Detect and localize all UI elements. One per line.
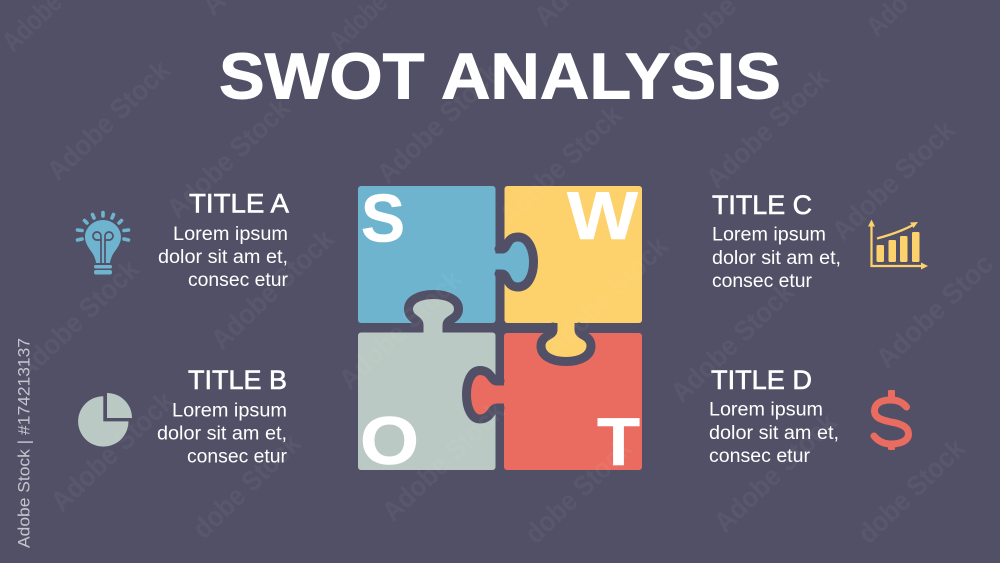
- text block: title D: TITLE D: [711, 365, 812, 395]
- watermark pattern: dobe Stock: [519, 432, 638, 549]
- watermark pattern: Adobe Stock: [700, 62, 835, 194]
- puzzle tab: weaknesses into threats: [541, 320, 591, 362]
- puzzle tab: strengths into weaknesses: [493, 237, 534, 287]
- watermark pattern: Adobe Stock: [826, 114, 961, 246]
- panel: SWOT puzzle: [358, 178, 642, 480]
- icon: growth chart: [868, 220, 928, 270]
- watermark pattern: Adobe Stock: [161, 92, 296, 224]
- letter T: T: [597, 404, 640, 480]
- text block: title A: [158, 188, 289, 291]
- watermark pattern: Adobe Stock: [376, 395, 511, 527]
- puzzle piece: weaknesses: [504, 186, 642, 323]
- puzzle piece: strengths: [358, 186, 496, 323]
- puzzle tab: opportunities into strengths: [408, 294, 458, 335]
- icon: pie chart: [78, 393, 132, 447]
- text block: title B: consec etur: [187, 446, 288, 468]
- text block: title D: Lorem ipsum: [709, 400, 823, 420]
- watermark pattern: Adobe Stock: [708, 406, 843, 538]
- text block: title B: dolor sit am et,: [157, 424, 287, 444]
- watermark pattern: Adobe Stock: [371, 57, 506, 189]
- text block: title C: TITLE C: [712, 190, 812, 220]
- text block: title C: Lorem ipsum: [712, 224, 826, 246]
- text block: title B: [157, 365, 288, 468]
- letter S: S: [361, 180, 405, 256]
- text block: title A: Lorem ipsum: [173, 224, 288, 245]
- watermark pattern: Adobe Stock: [333, 263, 468, 395]
- text block: title D: dolor sit am et,: [709, 423, 839, 444]
- text block: title C: [712, 190, 841, 292]
- icon: light bulb: [78, 212, 128, 274]
- watermark pattern: Adobe Stock: [10, 253, 145, 385]
- watermark pattern: Adobe Stock: [45, 385, 180, 517]
- text block: title B: TITLE B: [188, 365, 287, 395]
- watermark pattern: Adobe Stoc: [870, 248, 999, 374]
- text block: title B: Lorem ipsum: [172, 400, 287, 422]
- text block: title D: [709, 365, 839, 467]
- watermark pattern: Adobe Stock: [665, 276, 800, 408]
- puzzle tab: threats into opportunities: [466, 370, 506, 419]
- watermark pattern: Adobe Stock: [41, 54, 176, 186]
- watermark pattern: Adobe Stock: [493, 99, 628, 231]
- letter O: O: [360, 403, 419, 479]
- stock credit: Adobe Stock | #174213137: [14, 338, 34, 548]
- text block: title A: dolor sit am et,: [158, 247, 288, 268]
- watermark pattern: dobe Stock: [852, 432, 971, 549]
- title: SWOT ANALYSIS: [219, 40, 781, 112]
- icon: dollar sign: [874, 390, 908, 450]
- puzzle piece: threats: [504, 333, 642, 470]
- watermark pattern: Adobe Stock: [539, 230, 674, 362]
- text block: title D: consec etur: [709, 446, 811, 467]
- text block: title C: consec etur: [712, 271, 813, 292]
- puzzle piece: opportunities: [358, 332, 496, 470]
- text block: title A: consec etur: [188, 270, 289, 291]
- letter W: W: [567, 178, 639, 254]
- watermark pattern: Adobe Stock: [205, 223, 340, 355]
- text block: title C: dolor sit am et,: [712, 248, 841, 269]
- watermark pattern: dobe Stock: [187, 427, 306, 544]
- text block: title A: TITLE A: [189, 188, 289, 218]
